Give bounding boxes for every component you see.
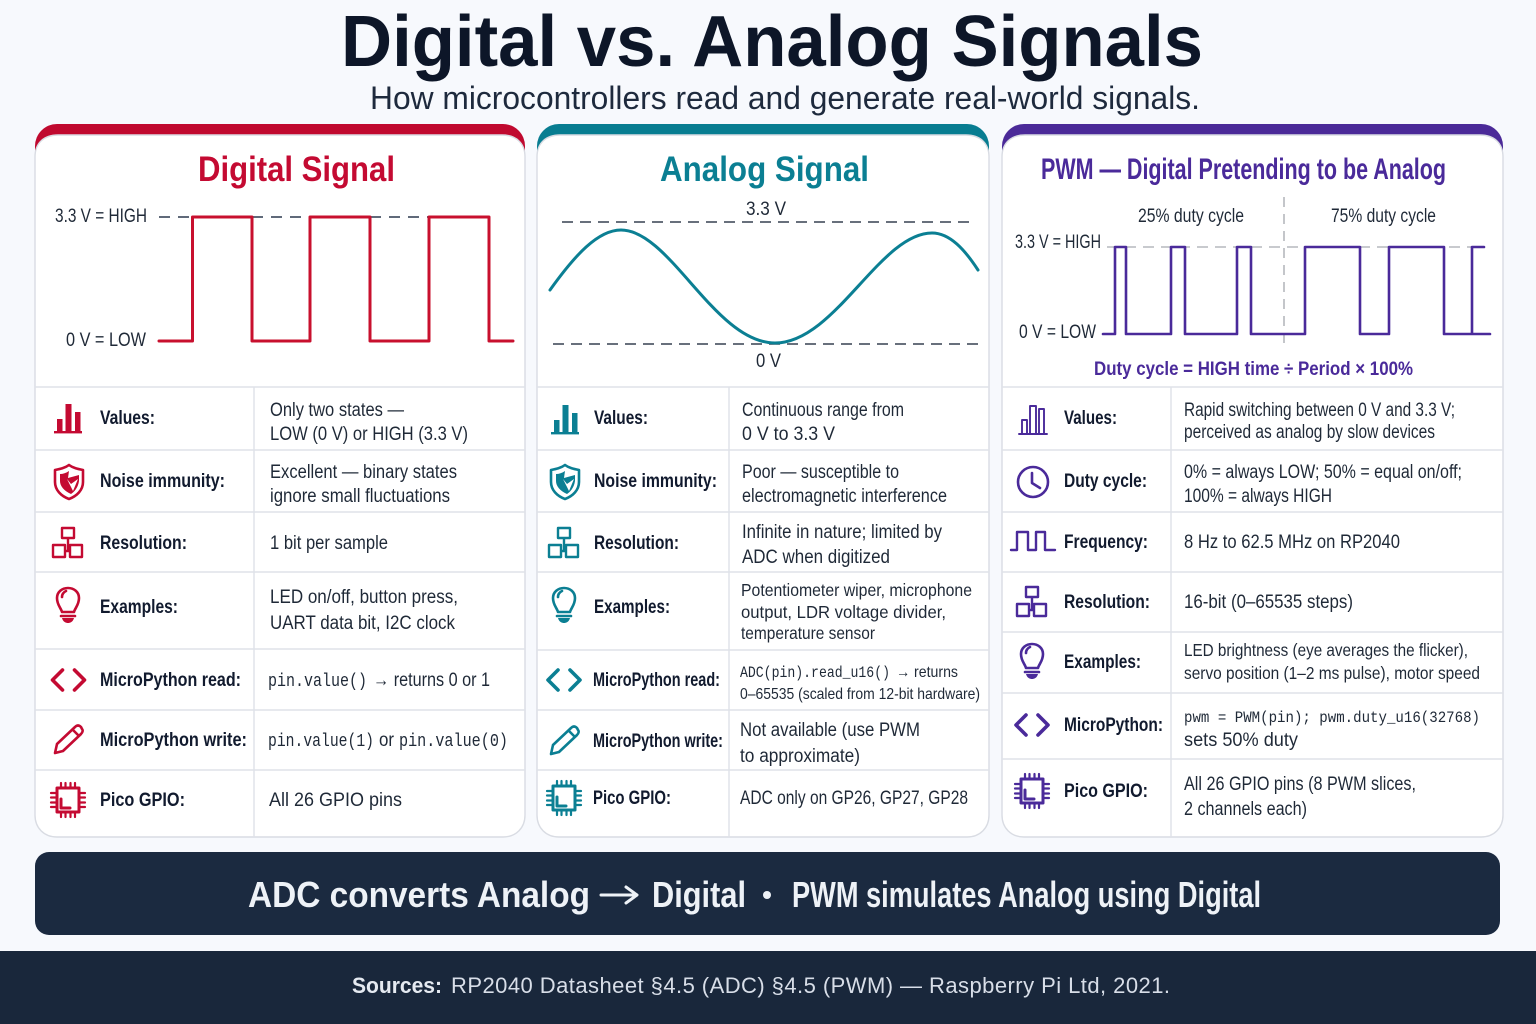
- chart: pwm waveform: 3.3 V = HIGH: [1015, 232, 1101, 253]
- chart: digital square wave: 3.3 V = HIGH: [55, 206, 147, 227]
- row: noise immunity: electromagnetic interference: [742, 486, 947, 507]
- row: examples: [553, 580, 972, 643]
- row: duty cycle: Duty cycle:: [1064, 471, 1147, 492]
- row: pico gpio: ADC only on GP26, GP27, GP28: [740, 788, 968, 809]
- row: noise immunity: [55, 462, 457, 507]
- row: pico gpio: All 26 GPIO pins: [269, 790, 402, 811]
- row: micropython read: 0–65535 (scaled from 12-bit hardware): [740, 686, 980, 703]
- row: resolution: Resolution:: [594, 533, 679, 554]
- row: noise immunity: [551, 462, 947, 507]
- row: values: 0 V to 3.3 V: [742, 424, 835, 445]
- chart: pwm waveform: 25% duty cycle: [1138, 206, 1244, 227]
- row: micropython read: → returns 0 or 1: [373, 670, 490, 691]
- row: micropython write: MicroPython write:: [593, 731, 723, 752]
- row: noise immunity: Excellent — binary states: [270, 462, 457, 483]
- row: examples: UART data bit, I2C clock: [270, 613, 455, 634]
- row: values: perceived as analog by slow devices: [1184, 422, 1435, 443]
- row: frequency: Frequency:: [1064, 532, 1148, 553]
- row: pico gpio: [547, 781, 968, 815]
- row: values: [551, 400, 904, 445]
- row: resolution: 1 bit per sample: [270, 533, 388, 554]
- chart: analog sine wave: 3.3 V: [746, 199, 786, 220]
- row: micropython write: MicroPython write:: [100, 730, 247, 751]
- row: duty cycle: 100% = always HIGH: [1184, 486, 1332, 507]
- chart: analog sine wave: [550, 199, 978, 372]
- row: micropython write: or: [379, 730, 395, 751]
- row: resolution: [1017, 587, 1353, 616]
- panel: digital signal: [35, 124, 525, 837]
- row: micropython: MicroPython:: [1064, 715, 1163, 736]
- row: resolution: 16-bit (0–65535 steps): [1184, 592, 1353, 613]
- row: resolution: ADC when digitized: [742, 547, 890, 568]
- row: values: Only two states —: [270, 400, 404, 421]
- chart: pwm waveform: 0 V = LOW: [1019, 322, 1096, 343]
- row: examples: [1021, 640, 1480, 683]
- row: frequency: [1011, 532, 1400, 553]
- row: examples: temperature sensor: [741, 623, 875, 643]
- row: pico gpio: All 26 GPIO pins (8 PWM slices,: [1184, 774, 1416, 795]
- row: resolution: Infinite in nature; limited by: [742, 522, 942, 543]
- row: noise immunity: Noise immunity:: [100, 471, 225, 492]
- row: micropython: sets 50% duty: [1184, 730, 1298, 751]
- row: resolution: Resolution:: [100, 533, 187, 554]
- panel: analog signal: [537, 124, 989, 837]
- row: micropython read: [548, 664, 980, 703]
- row: values: Continuous range from: [742, 400, 904, 421]
- row: micropython write: Not available (use PWM: [740, 720, 920, 741]
- row: micropython read: MicroPython read:: [100, 670, 241, 691]
- row: pico gpio: [51, 783, 402, 817]
- row: micropython read: MicroPython read:: [593, 670, 720, 691]
- row: resolution: [53, 528, 388, 557]
- row: noise immunity: ignore small fluctuations: [270, 486, 450, 507]
- summary banner: Digital: [652, 874, 746, 915]
- row: examples: Examples:: [1064, 652, 1141, 673]
- row: pico gpio: 2 channels each): [1184, 799, 1307, 820]
- chart: pwm waveform: 75% duty cycle: [1331, 206, 1436, 227]
- row: micropython read: pin.value(): [268, 672, 367, 692]
- sources footer: RP2040 Datasheet §4.5 (ADC) §4.5 (PWM) — Raspberry Pi Ltd, 2021.: [451, 973, 1170, 998]
- row: values: Rapid switching between 0 V and 3.3 V;: [1184, 400, 1455, 421]
- row: examples: Examples:: [594, 597, 670, 618]
- row: examples: [57, 587, 458, 634]
- row: resolution: Resolution:: [1064, 592, 1150, 613]
- summary banner: [35, 852, 1500, 935]
- row: values: Values:: [100, 408, 155, 429]
- row: noise immunity: Poor — susceptible to: [742, 462, 899, 483]
- heading: digital signal: Digital Signal: [198, 150, 395, 189]
- row: micropython write: [551, 720, 920, 767]
- row: duty cycle: 0% = always LOW; 50% = equal on/off;: [1184, 462, 1462, 483]
- row: micropython write: [55, 726, 508, 753]
- row: frequency: 8 Hz to 62.5 MHz on RP2040: [1184, 532, 1400, 553]
- sources footer: Sources:: [352, 973, 442, 998]
- row: pico gpio: [1015, 774, 1416, 820]
- chart: digital square wave: 0 V = LOW: [66, 330, 146, 351]
- row: pico gpio: Pico GPIO:: [593, 788, 671, 809]
- row: values: [1019, 400, 1455, 443]
- title: Digital vs. Analog Signals: [341, 2, 1203, 82]
- panel: pwm: [1002, 124, 1503, 837]
- row: micropython write: pin.value(0): [399, 732, 508, 752]
- row: values: Values:: [1064, 408, 1117, 429]
- row: duty cycle: [1018, 462, 1462, 507]
- chart: pwm waveform: [1015, 197, 1490, 380]
- row: examples: Potentiometer wiper, microphone: [741, 580, 972, 600]
- chart: digital square wave: [55, 206, 513, 351]
- heading: analog signal: Analog Signal: [660, 150, 869, 189]
- summary banner: ADC converts Analog: [248, 874, 590, 915]
- row: pico gpio: Pico GPIO:: [100, 790, 185, 811]
- summary banner: PWM simulates Analog using Digital: [792, 874, 1261, 915]
- row: values: LOW (0 V) or HIGH (3.3 V): [270, 424, 468, 445]
- row: examples: LED brightness (eye averages the flicker),: [1184, 640, 1468, 660]
- row: values: [54, 400, 468, 445]
- row: pico gpio: Pico GPIO:: [1064, 781, 1148, 802]
- subtitle: How microcontrollers read and generate real-world signals.: [370, 80, 1200, 116]
- row: micropython read: → returns: [896, 664, 958, 681]
- row: resolution: [549, 522, 942, 568]
- row: examples: servo position (1–2 ms pulse), motor speed: [1184, 663, 1480, 683]
- chart: analog sine wave: 0 V: [756, 351, 781, 372]
- chart: pwm waveform: Duty cycle = HIGH time ÷ Period × 100%: [1094, 359, 1413, 380]
- row: micropython read: [52, 670, 490, 692]
- sources footer: [0, 951, 1536, 1024]
- row: micropython: [1016, 709, 1480, 751]
- row: micropython: pwm = PWM(pin); pwm.duty_u16(32768): [1184, 709, 1480, 727]
- row: micropython read: ADC(pin).read_u16(): [740, 664, 890, 682]
- row: values: Values:: [594, 408, 648, 429]
- row: noise immunity: Noise immunity:: [594, 471, 717, 492]
- row: examples: output, LDR voltage divider,: [741, 602, 946, 622]
- row: examples: LED on/off, button press,: [270, 587, 458, 608]
- row: micropython write: to approximate): [740, 746, 860, 767]
- row: micropython write: pin.value(1): [268, 732, 374, 752]
- row: examples: Examples:: [100, 597, 178, 618]
